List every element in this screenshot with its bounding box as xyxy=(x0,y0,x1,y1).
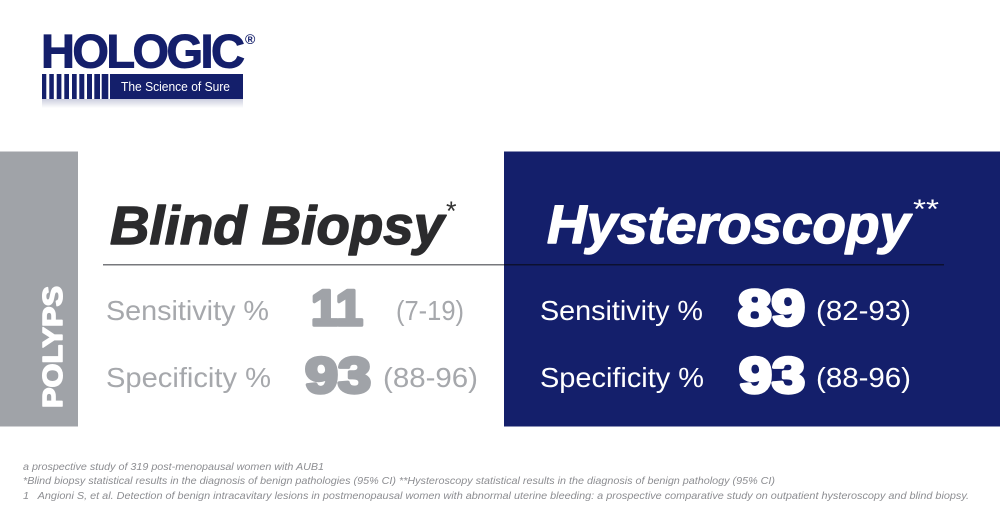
logo reflection xyxy=(42,99,243,108)
hysteroscopy specificity row: 93 xyxy=(739,348,805,404)
footnote: reference: 1 Angioni S, et al. Detection of benign intracavitary lesions in postmenopausal women with abnormal uterine bleeding: a prospective comparative study on outpatient hysteroscopy and blind biopsy. xyxy=(23,490,969,502)
logo barcode stripes xyxy=(42,74,108,99)
heading: blind biopsy: Blind Biopsy xyxy=(110,196,447,256)
polyps label: POLYPS xyxy=(37,286,68,408)
hysteroscopy specificity row: (88-96) xyxy=(816,362,911,393)
footnote: study: a prospective study of 319 post-menopausal women with AUB1 xyxy=(23,461,324,473)
logo: Hologic xyxy=(41,24,256,108)
hysteroscopy sensitivity row: 89 xyxy=(738,280,805,336)
panel: polyps side bar xyxy=(0,152,78,426)
heading: hysteroscopy: Hysteroscopy xyxy=(547,195,913,255)
panel: blind biopsy xyxy=(106,196,478,404)
blind biopsy sensitivity row: (7-19) xyxy=(396,295,464,326)
hysteroscopy asterisks: ** xyxy=(913,194,940,224)
blind biopsy specificity row xyxy=(106,348,478,404)
blind biopsy specificity row: (88-96) xyxy=(383,362,478,393)
blind biopsy sensitivity row: Sensitivity % xyxy=(106,295,269,326)
logo tagline: The Science of Sure xyxy=(121,80,230,94)
blind biopsy sensitivity row: 11 xyxy=(311,280,363,336)
hysteroscopy sensitivity row xyxy=(540,280,911,336)
blind biopsy specificity row: 93 xyxy=(305,348,371,404)
hysteroscopy specificity row: Specificity % xyxy=(540,362,704,393)
heading divider xyxy=(103,264,944,266)
logo registered mark: ® xyxy=(245,31,256,47)
hysteroscopy sensitivity row: Sensitivity % xyxy=(540,295,703,326)
logo wordmark: HOLOGIC xyxy=(41,24,245,78)
blind biopsy sensitivity row xyxy=(106,280,464,336)
blind biopsy specificity row: Specificity % xyxy=(106,362,271,393)
blind biopsy asterisk: * xyxy=(446,196,457,226)
hysteroscopy specificity row xyxy=(540,348,911,404)
logo tagline bar xyxy=(110,74,243,99)
panel: hysteroscopy xyxy=(504,152,1000,426)
footnotes xyxy=(23,461,969,502)
hysteroscopy sensitivity row: (82-93) xyxy=(816,295,911,326)
footnote: statistics: *Blind biopsy statistical results in the diagnosis of benign pathologies (95% CI) **Hysteroscopy statistical results in the diagnosis of benign pathology (95% CI) xyxy=(23,475,775,487)
